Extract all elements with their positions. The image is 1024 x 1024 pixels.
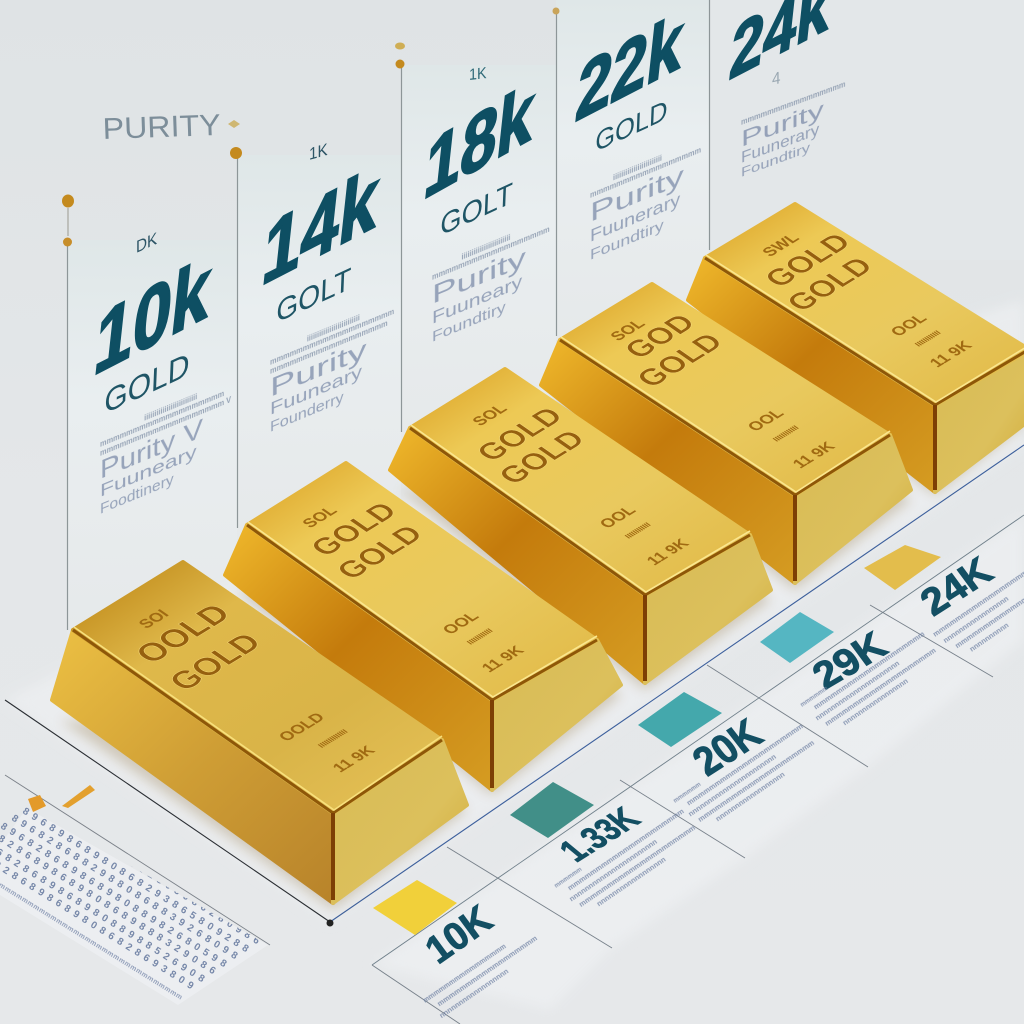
small label: 1K [469,64,487,84]
icon: pin [230,147,242,159]
stamp [758,229,976,370]
panel: 14k purity [230,140,401,545]
icon: pin [396,60,404,68]
heading: 18k: 18k [420,63,539,218]
text block: nnnnnnnnnnnnnnnnn [941,594,1011,645]
subheading: golt: GOLT [276,261,352,330]
stamp: IIIIIIIIIIIIII [316,728,350,749]
label: 20K [684,711,771,784]
icon: diamond [228,120,240,128]
stamp [127,598,379,775]
baseline lines [5,300,1024,926]
table text: 8 2 9 8 0 4 6 8 0 8 3 9 6 2 8 0 5 9 8 6 2 8 0 9 8 6 [31,798,262,948]
stamp: OOL [745,406,788,434]
stamp: 11 9K [479,643,528,675]
text block: iiiiiiiiiiiiiiiiiiiiiiii [461,233,510,262]
stamp: OOL [440,609,483,637]
text block: mmmmmmmmmmmmmmmmmmm V [100,395,232,458]
stamp: IIIIIIIIIIII [465,627,495,646]
stamp: IIIIIIIIIIII [913,329,943,348]
swatch: teal [638,692,722,747]
text block: iiiiiiiiiiiiiiiiiiiiiiiiii [144,392,197,423]
text block: mmmmmmmmmmmmmmmmmm [270,318,388,376]
stamp: IIIIIIIIIIII [771,424,801,443]
text block: Purity V [100,414,204,485]
text block [554,801,703,922]
text block [422,926,545,1023]
text block: Foundtiry [741,139,811,180]
table text: 8 9 6 8 9 8 6 8 9 8 0 8 6 8 2 9 3 8 6 5 8 0 9 2 8 8 [20,806,251,956]
swatch: cyan [760,612,834,663]
text block [270,299,394,436]
bar 5 [688,204,1024,495]
text block [741,79,845,180]
text block: mmmmmm [800,686,829,709]
panel: 18k purity [395,42,556,440]
side table [0,775,270,1005]
stamp: GOLD [492,426,593,490]
bar 4 [541,284,911,590]
text block: nnnnnnnnnnnnnnnnnnnnnn [813,658,901,722]
text block: mmmmmmmmmmmmmmmmmmmm [823,645,938,728]
text block [432,216,550,346]
stamp: GOLD [630,329,731,393]
stamp: OOL [597,503,640,531]
stamp: SOL [607,317,649,344]
text block: mmmmmmmmmmmmmmmmmmm [100,389,224,449]
text block: nnnnnnnnnnnnnnnnnnnnnnn [686,752,778,818]
panel: 22k purity [552,0,709,340]
subheading: gold: GOLD [595,94,668,158]
stamp: GOLD [304,498,405,562]
label: 29K [805,624,895,697]
text block: mmmmmmmmmmmmmmmmm [590,145,701,200]
icon: pin [552,8,560,14]
text block: nnnnnnnnnnnnnnnnnnnnnnn [567,837,659,903]
text block: Fuunerary [741,121,819,167]
heading: 10k: 10k [90,236,216,395]
text block: Fuuneary [270,361,362,419]
text block: mmmmmmmmmmmmmmmmmm [435,933,539,1008]
icon: pin top [62,194,74,208]
legend item: 10K [373,880,545,1023]
text block: Fuuneary [100,441,197,501]
bar 3 [390,369,771,690]
legend item: 24K [864,545,1024,666]
text block: nnnnnnnnnnnnnnnnnn [595,855,668,908]
swatch: green [510,782,594,838]
text block: nnnnnnnnnnnnnnnnn [841,676,910,727]
table text: 8 9 6 8 2 8 6 8 9 8 6 8 9 8 0 8 8 9 8 2 6 8 0 5 9 8 [0,821,229,971]
text block: Purity [741,96,824,152]
text block: nnnnnnnnnn [968,620,1011,653]
bar 2 [225,463,621,795]
stamp: OOLD [276,711,329,744]
bar 1 [52,562,467,910]
label: 10K [418,897,501,972]
text block [800,623,943,741]
text block [100,378,232,518]
icon: pin [63,238,72,246]
icon: pin top [395,42,405,50]
swatch: yellow [373,880,457,935]
text block: Foundtiry [432,298,506,346]
stamp: OOLD [127,598,238,669]
stamp: GOD [618,309,703,364]
legend item: 20K [638,692,822,837]
stamp [469,402,693,568]
text block: mmmmmmmmmmmmmmmmmm [432,224,550,282]
text block: Fuunerary [590,189,680,246]
stamp: SOI [136,607,173,631]
marker: orange square [28,795,46,812]
heading: 14k: 14k [258,146,384,305]
table text [0,798,262,1002]
text block: Purity [432,243,526,310]
legend grid [372,515,1024,1024]
table text: 8 9 6 8 2 8 6 8 8 2 9 8 8 0 8 6 8 8 3 9 2 6 8 0 9 8 [9,813,240,963]
text block: nnnnnnnnnnnnnnnnnn [437,966,510,1020]
label: 1.33K [550,801,648,868]
legend item: 29K [760,612,943,741]
text block: mmmmmmmmmmmmmmmmmmmm [812,629,926,711]
subheading: golt: GOLT [440,177,513,243]
heading: purity: PURITY [102,109,221,146]
stamp: SOL [299,504,341,531]
text block: mmmmmm [673,782,702,805]
text block: mmmmmmmmmmmmmmmmmmmmm [577,823,697,909]
text block: mmmmmmmmmmmmmmmmmmmmm [696,738,816,824]
text block: mmmmmmmmmmmmmmmm [422,943,508,1005]
text block: mmmmmm [554,867,583,890]
stamp: 11 9K [330,743,379,775]
text block: Foundtiry [590,216,664,264]
text block: mmmmmmmmmmmmmmmm [741,79,845,127]
legend item: 1.33K [510,782,703,922]
text block [590,137,701,264]
stamp: 11 9K [927,338,976,370]
text block: Purity [270,335,367,403]
text block [673,716,822,837]
text block: iiiiiiiiiiiiiiiiiiiiiiiiii [307,313,360,344]
stamp: 11 9K [644,536,693,568]
stamp: SWL [759,231,804,260]
small label: 1K [309,140,328,164]
stamp: GOLD [330,521,431,585]
text block: Purity [590,161,684,228]
swatch: gold [864,545,941,590]
text block: Foodtinery [100,470,174,518]
text block: Founderry [270,388,344,436]
stamp: GOLD [758,229,859,293]
stamp: GOLD [161,627,269,696]
text block: mmmmmmmmmmmmmmmmmmmmm [566,806,686,892]
stamp: OOL [888,311,931,339]
marker: orange dash [62,785,95,808]
stamp: IIIIIIIIIIII [623,521,653,540]
text block: iiiiiiiiiiiiiiiiiiiiiiii [613,153,662,183]
text block: mmmmmmmmmmmmmmmmmmmmm [685,721,805,807]
icon: origin dot [326,920,334,926]
stamp [607,309,839,471]
stamp: 11 9K [790,439,839,471]
subheading: gold: GOLD [104,346,190,422]
stamp [299,498,528,675]
panel: 10k purity [62,194,237,640]
faint numeral: 4 [772,69,781,89]
text block: nnnnnnnnnnnnnnnnnn [714,770,787,823]
small label: DK [136,228,158,257]
label: 24K [913,549,1001,624]
stamp: GOLD [470,403,571,467]
text block: Fuuneary [432,271,522,328]
stamp: GOLD [780,253,881,317]
panel: 24k purity [709,0,1024,260]
stamp: SOL [469,402,511,429]
text block: mmmmmmmmmmmmmmmmmmm [270,307,394,367]
